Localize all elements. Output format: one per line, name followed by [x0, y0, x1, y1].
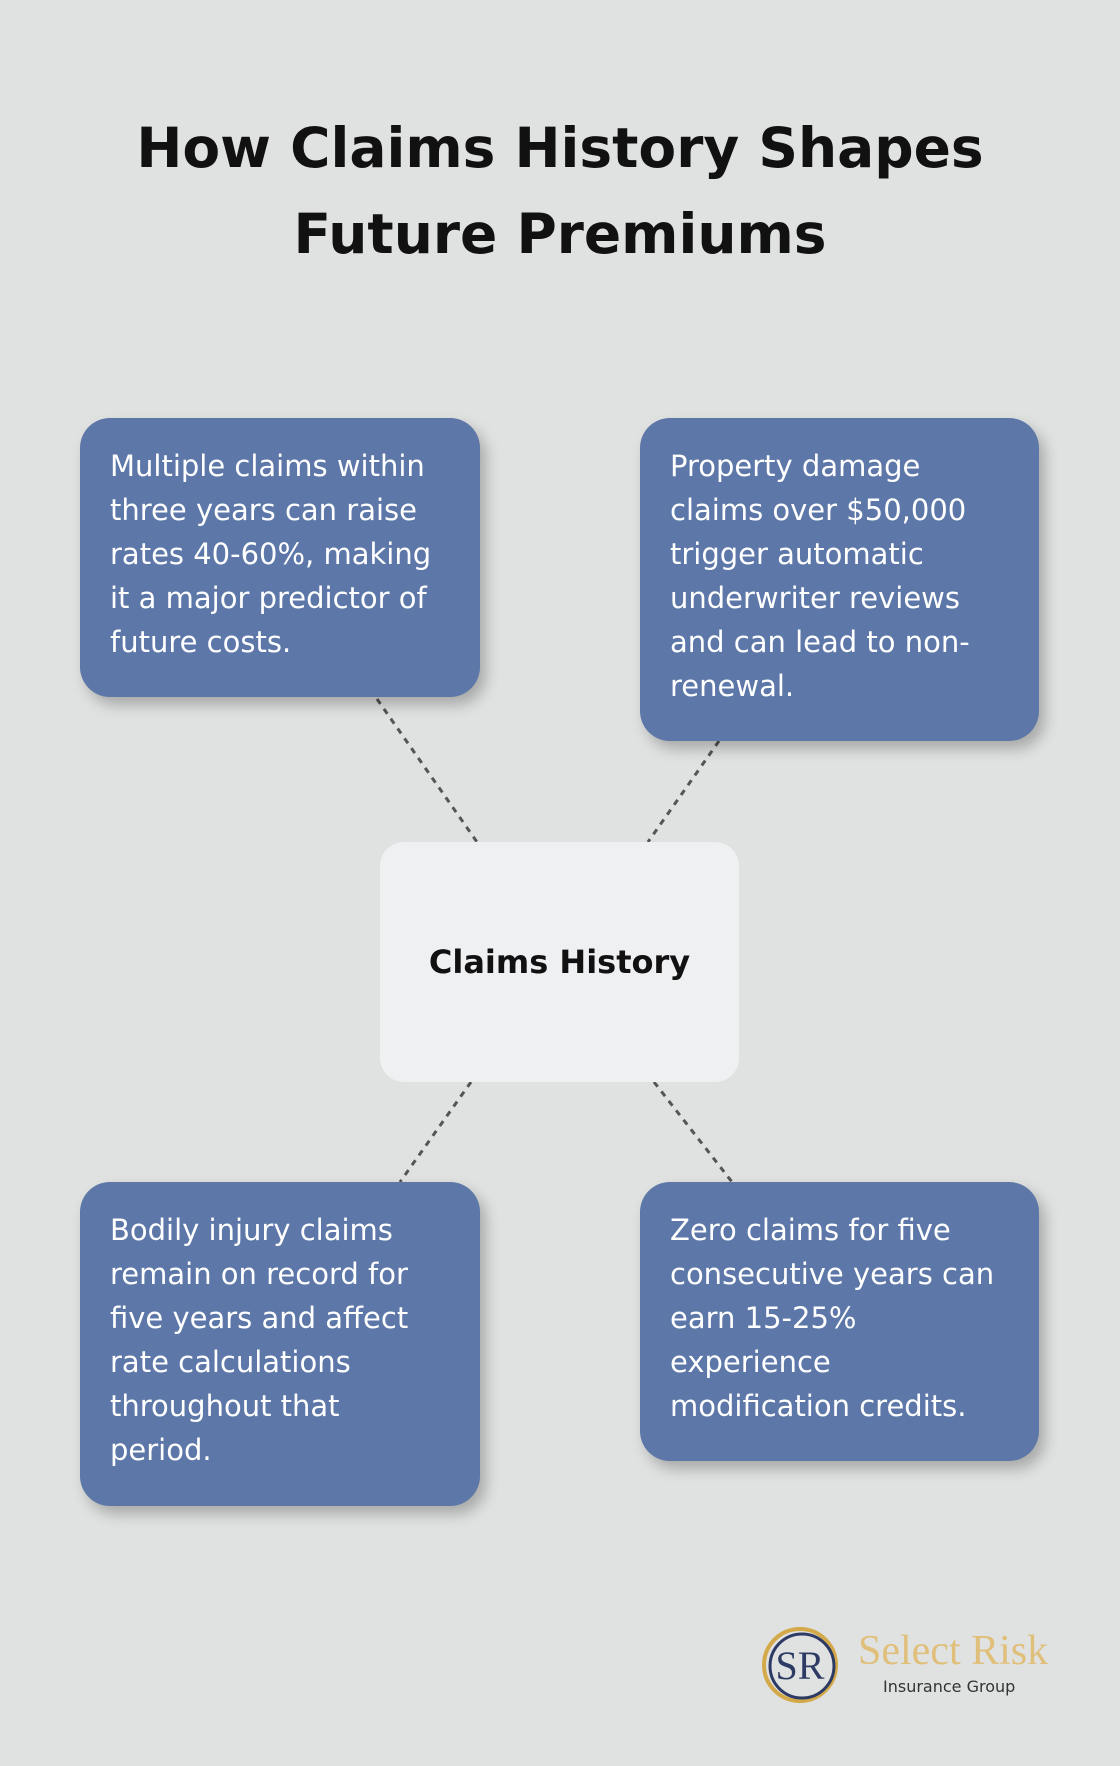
box: multiple claims: rates 40-60%, making [110, 537, 431, 571]
center: claims history [380, 842, 739, 1082]
logo text: Select Risk [858, 1628, 1048, 1674]
center: claims history: Claims History [429, 943, 690, 981]
box: bodily injury: throughout that [110, 1389, 340, 1423]
box: multiple claims: future costs. [110, 625, 291, 659]
title: How Claims History Shapes [136, 116, 984, 180]
box: zero claims: consecutive years can [670, 1257, 994, 1291]
box: multiple claims: Multiple claims within [110, 449, 425, 483]
box: multiple claims: three years can raise [110, 493, 417, 527]
box: bodily injury: period. [110, 1433, 212, 1467]
box: multiple claims: it a major predictor of [110, 581, 427, 615]
box: property damage: underwriter reviews [670, 581, 960, 615]
box: property damage [640, 418, 1039, 741]
icon: logo circle [762, 1627, 838, 1703]
box: zero claims [640, 1182, 1039, 1461]
box: multiple claims [80, 418, 480, 697]
box: zero claims: earn 15-25% [670, 1301, 856, 1335]
title: Future Premiums [293, 202, 827, 266]
box: zero claims: Zero claims for five [670, 1213, 951, 1247]
box: zero claims: experience [670, 1345, 831, 1379]
box: property damage: trigger automatic [670, 537, 924, 571]
box: zero claims: modification credits. [670, 1389, 966, 1423]
icon: logo circle: SR [776, 1643, 825, 1688]
logo: Insurance Group [883, 1677, 1015, 1696]
title [136, 116, 984, 266]
box: bodily injury: remain on record for [110, 1257, 408, 1291]
logo [762, 1627, 1048, 1703]
box: property damage: claims over $50,000 [670, 493, 966, 527]
box: bodily injury: five years and affect [110, 1301, 408, 1335]
box: property damage: Property damage [670, 449, 920, 483]
box: bodily injury: rate calculations [110, 1345, 351, 1379]
box: bodily injury [80, 1182, 480, 1506]
box: bodily injury: Bodily injury claims [110, 1213, 393, 1247]
box: property damage: and can lead to non- [670, 625, 970, 659]
box: property damage: renewal. [670, 669, 794, 703]
